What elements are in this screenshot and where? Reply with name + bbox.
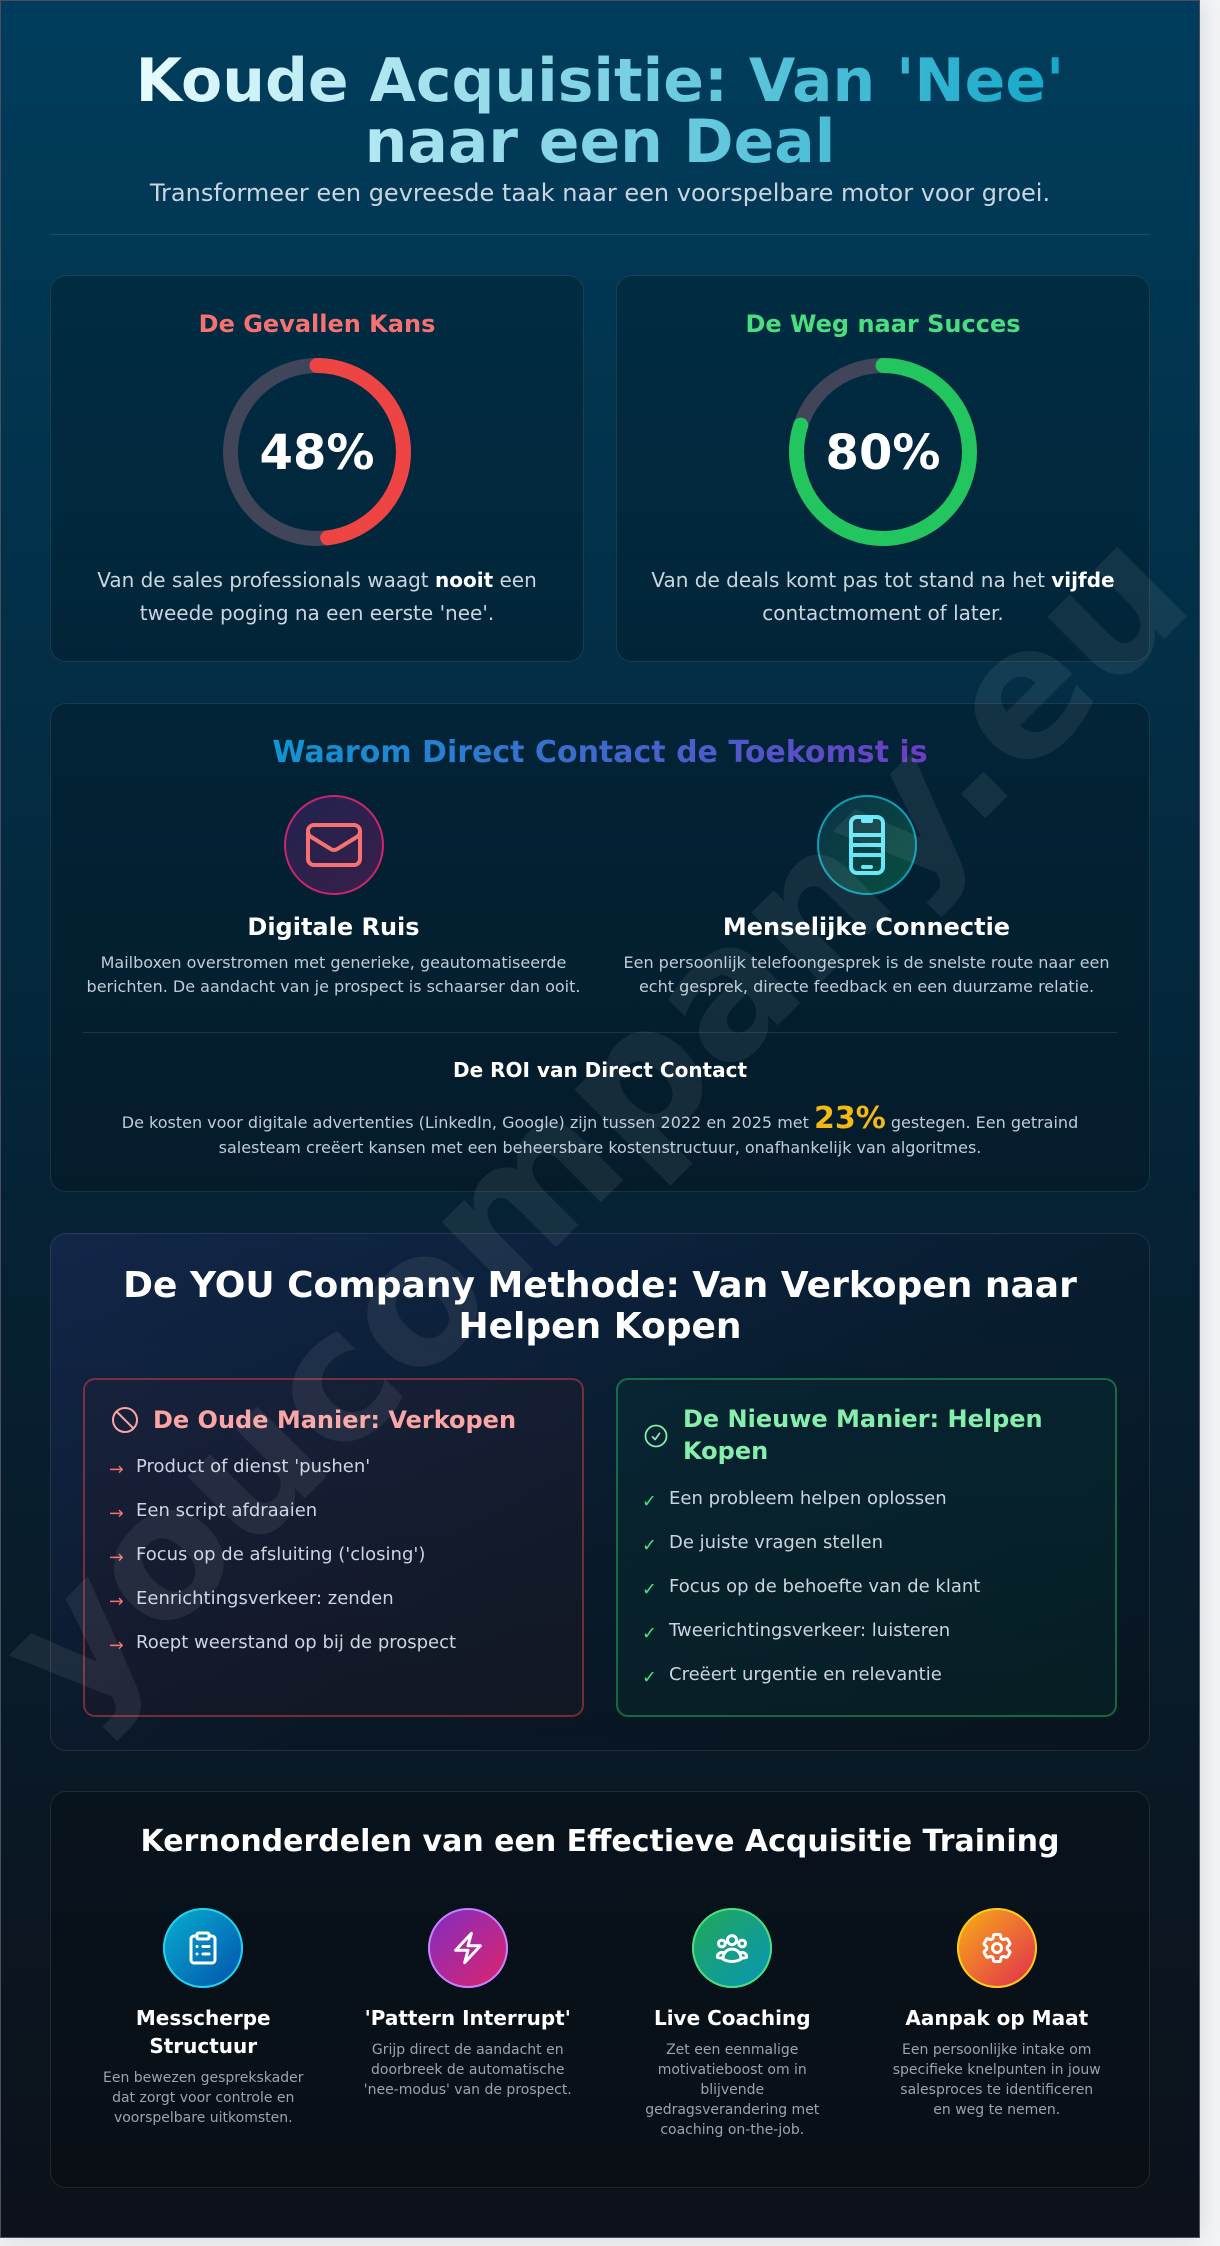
item text: [645, 2042, 819, 2138]
title: naar een Deal: [365, 106, 835, 176]
card: De Nieuwe Manier: [616, 1378, 1117, 1717]
item: Messcherpe Structuur: [103, 1908, 304, 2126]
card: De Oude Manier: [83, 1378, 584, 1717]
icon: people: [692, 1908, 772, 1988]
stat description: Van de deals komt pas tot stand na het vijfde: [651, 568, 1115, 592]
stat description: [97, 568, 537, 625]
column text: Digitale Ruis: [87, 952, 580, 996]
panel: De Weg naar Succes: [616, 275, 1150, 662]
item heading: Aanpak op Maat: [905, 2006, 1088, 2030]
list: new way: ✓: [642, 1536, 657, 1556]
column text: Digitale Ruis: berichten. De aandacht van je prospect is schaarser dan ooit.: [87, 976, 580, 996]
card heading: Kopen: [683, 1437, 768, 1465]
icon: gear: [957, 1908, 1037, 1988]
column text: Menselijke Connectie: [623, 952, 1110, 996]
item text: Zet een eenmalige: [666, 2042, 798, 2058]
header: [50, 0, 1150, 235]
column text: Menselijke Connectie: echt gesprek, directe feedback en een duurzame relatie.: [639, 976, 1094, 996]
icon: ban: [112, 1407, 138, 1433]
icon: phone: [817, 795, 917, 895]
item text: salesproces te identificeren: [900, 2082, 1093, 2098]
title: [136, 46, 1064, 176]
list: old way: Product of dienst 'pushen': [136, 1456, 370, 1477]
item: Aanpak op Maat: [893, 1908, 1101, 2118]
panel: Waarom Direct Contact: [50, 703, 1150, 1192]
item text: coaching on-the-job.: [660, 2122, 804, 2138]
item text: en weg te nemen.: [933, 2102, 1060, 2118]
list: new way: ✓: [642, 1624, 657, 1644]
list: old way: →: [109, 1592, 124, 1612]
section heading: Kernonderdelen van een Effectieve Acquisitie Training: [140, 1824, 1060, 1859]
list: old way: [109, 1456, 456, 1656]
stat description: [651, 568, 1115, 625]
donut chart: 48%: [223, 358, 411, 546]
list: new way: Focus op de behoefte van de klant: [669, 1576, 980, 1597]
list: new way: ✓: [642, 1668, 657, 1688]
panel: De Gevallen Kans: [50, 275, 584, 662]
ROI heading: De ROI van Direct Contact: [453, 1058, 747, 1082]
item text: Grijp direct de aandacht en: [372, 2042, 564, 2058]
subtitle: Transformeer een gevreesde taak naar een voorspelbare motor voor groei.: [150, 179, 1050, 207]
title: Koude Acquisitie: Van 'Nee': [136, 46, 1064, 116]
item text: voorspelbare uitkomsten.: [114, 2110, 293, 2126]
section heading: Waarom Direct Contact de Toekomst is: [272, 735, 928, 770]
item text: motivatieboost om in: [658, 2062, 807, 2078]
item text: Een persoonlijke intake om: [902, 2042, 1091, 2058]
stat description: tweede poging na een eerste 'nee'.: [140, 601, 494, 625]
list: old way: →: [109, 1504, 124, 1524]
ROI text with 23% stat: De kosten voor digitale advertenties (LinkedIn, Google) zijn tussen 2022 en 2025 met 23% gestegen. Een getraind: [122, 1101, 1078, 1136]
list: new way: Tweerichtingsverkeer: luisteren: [669, 1620, 950, 1641]
item text: dat zorgt voor controle en: [112, 2090, 294, 2106]
icon: envelope: [284, 795, 384, 895]
item text: [364, 2042, 572, 2098]
card heading: [683, 1405, 1043, 1465]
list: old way: →: [109, 1548, 124, 1568]
ROI text with 23% stat: salesteam creëert kansen met een beheersbare kostenstructuur, onafhankelijk van algoritmes.: [219, 1138, 981, 1157]
item heading: Messcherpe: [136, 2006, 271, 2030]
list: old way: →: [109, 1636, 124, 1656]
item text: gedragsverandering met: [645, 2102, 819, 2118]
list: old way: Focus op de afsluiting ('closing'): [136, 1544, 425, 1565]
panel heading: De Gevallen Kans: [199, 310, 435, 338]
item: Pattern Interrupt: [364, 1908, 572, 2098]
item text: blijvende: [700, 2082, 764, 2098]
card heading: De Oude Manier: Verkopen: [153, 1406, 516, 1434]
list: new way: [642, 1488, 980, 1688]
list: new way: Creëert urgentie en relevantie: [669, 1664, 942, 1685]
list: new way: Een probleem helpen oplossen: [669, 1488, 947, 1509]
stat description: contactmoment of later.: [762, 601, 1004, 625]
panel: De YOU Company Methode: [50, 1233, 1150, 1751]
item heading: 'Pattern Interrupt': [365, 2006, 571, 2030]
item text: [103, 2070, 304, 2126]
column heading: Menselijke Connectie: Menselijke Connectie: [723, 913, 1010, 941]
column text: Menselijke Connectie: Een persoonlijk telefoongesprek is de snelste route naar een: [623, 952, 1110, 972]
stat number: 80%: [826, 425, 940, 481]
stat description: Van de sales professionals waagt nooit een: [97, 568, 537, 592]
card heading: De Nieuwe Manier: Helpen: [683, 1405, 1043, 1433]
item text: specifieke knelpunten in jouw: [893, 2062, 1101, 2078]
list: new way: De juiste vragen stellen: [669, 1532, 883, 1553]
icon: check circle: [644, 1424, 668, 1448]
ROI text with 23% stat: [122, 1101, 1078, 1157]
item heading: Live Coaching: [654, 2006, 811, 2030]
section heading: De YOU Company Methode: Van Verkopen naar: [123, 1265, 1077, 1306]
item text: Een bewezen gesprekskader: [103, 2070, 303, 2086]
item text: [893, 2042, 1101, 2118]
panel: Kernonderdelen: [50, 1791, 1150, 2188]
section heading: Helpen Kopen: [458, 1306, 742, 1347]
icon: lightning bolt: [428, 1908, 508, 1988]
item text: 'nee-modus' van de prospect.: [364, 2082, 572, 2098]
list: old way: →: [109, 1460, 124, 1480]
column text: Digitale Ruis: Mailboxen overstromen met generieke, geautomatiseerde: [101, 952, 566, 972]
item heading: Structuur: [149, 2034, 257, 2058]
item: Live Coaching: [645, 1908, 819, 2138]
list: new way: ✓: [642, 1492, 657, 1512]
icon: clipboard: [163, 1908, 243, 1988]
panel heading: De Weg naar Succes: [745, 310, 1021, 338]
list: old way: Roept weerstand op bij de prospect: [136, 1632, 456, 1653]
list: old way: Een script afdraaien: [136, 1500, 317, 1521]
item text: doorbreek de automatische: [371, 2062, 564, 2078]
item heading: [136, 2006, 271, 2058]
list: new way: ✓: [642, 1580, 657, 1600]
column heading: Digitale Ruis: Digitale Ruis: [247, 913, 420, 941]
donut chart: 80%: [789, 358, 977, 546]
stat number: 48%: [260, 425, 374, 481]
list: old way: Eenrichtingsverkeer: zenden: [136, 1588, 394, 1609]
section heading: [123, 1265, 1077, 1347]
